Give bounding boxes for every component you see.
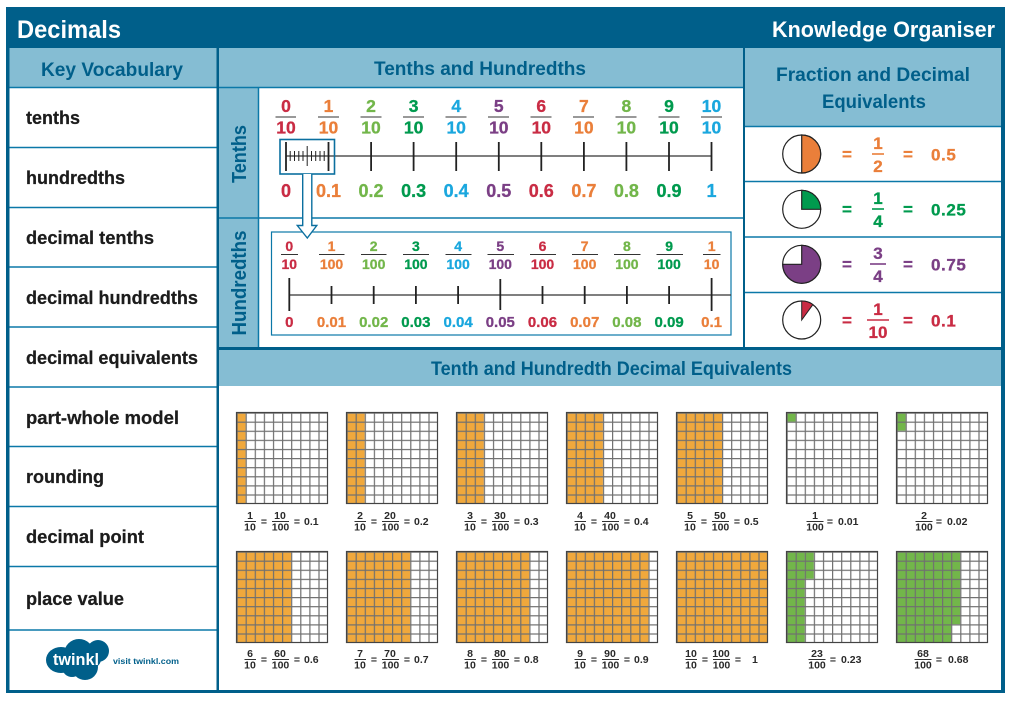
grid: 2/100 [896,412,988,504]
heading: key vocabulary [10,48,216,87]
equation: 1/10 = 10/100 = 0.1: 100 [272,522,289,534]
equation: 3/10 = 30/100 = 0.3 [464,510,539,534]
equation: 2/10 = 20/100 = 0.2: = [404,516,410,528]
equation: 9/10 = 90/100 = 0.9: = [624,654,630,666]
row: three quarters: = [842,255,852,274]
grid: 6/10 [236,552,328,642]
equation: 6/10 = 60/100 = 0.6 [244,648,319,672]
equation: 6/10 = 60/100 = 0.6: = [294,654,300,666]
heading: tenths and hundredths [219,48,743,87]
hundredths fractions: 1 [708,238,716,254]
row: three quarters: 0.75 [931,256,966,274]
hundredths fractions: 4 [454,238,462,254]
equation: 7/10 = 70/100 = 0.7: 0.7 [414,654,429,666]
equation: 7/10 = 70/100 = 0.7: = [371,654,377,666]
equation: 7/10 = 70/100 = 0.7: 10 [354,660,366,672]
side label: tenths: Tenths [229,125,251,183]
hundredths fractions: 100 [489,256,512,272]
grid: 8/10 [456,552,548,642]
equation: 2/10 = 20/100 = 0.2: 10 [354,522,366,534]
row: one tenth: = [903,311,913,330]
hundredths fractions: 100 [573,256,597,272]
tenths fractions: 10 [617,118,636,138]
equation: 10/10 = 100/100 = 1: 10 [685,660,697,672]
equation: 8/10 = 80/100 = 0.8: = [481,654,487,666]
equation: 7/10 = 70/100 = 0.7 [354,648,429,672]
hundredths fractions: 0 [285,238,293,254]
equation: 9/10 = 90/100 = 0.9: 100 [602,660,619,672]
grid: 5/10 [676,412,768,504]
equation: 8/10 = 80/100 = 0.8: 10 [464,660,476,672]
logo: twinkl [46,639,179,680]
equation: 1/10 = 10/100 = 0.1: 0.1 [304,516,319,528]
hundredths decimals: 0.04 [443,314,473,331]
number line: tenths [276,96,722,201]
grid: 4/10 [566,412,658,504]
equation: 68/100 = 0.68: 100 [914,660,932,672]
equation: 3/10 = 30/100 = 0.3: 0.3 [524,516,539,528]
panel: key vocabulary [10,48,216,690]
hundredths fractions: 100 [615,256,639,272]
equation: 6/10 = 60/100 = 0.6: 6 [247,648,253,660]
term: decimal equivalents: decimal equivalents [26,348,198,368]
equation: 23/100 = 0.23: 23 [811,648,823,660]
heading: fraction and decimal equivalents: Equivalents [822,92,926,113]
equation: 10/10 = 100/100 = 1: 10 [685,648,697,660]
row: one quarter: 1 [873,189,883,208]
row: one half: 0.5 [931,146,956,164]
equation: 5/10 = 50/100 = 0.5 [684,510,759,534]
hundredths decimals: 0 [285,314,293,331]
equation: 8/10 = 80/100 = 0.8: 80 [494,648,506,660]
term: decimal hundredths: decimal hundredths [26,288,198,308]
panel: fraction and decimal equivalents [745,48,1001,347]
term: decimal point: decimal point [26,527,144,547]
equation: 2/10 = 20/100 = 0.2: 2 [357,510,363,522]
equation: 8/10 = 80/100 = 0.8: = [514,654,520,666]
grid: 7/10 [346,552,438,642]
tenths fractions: 10 [361,118,381,138]
hundredths fractions: 10 [704,256,720,272]
equation: 10/10 = 100/100 = 1: = [702,654,708,666]
tenths fractions: 8 [622,96,632,116]
equation: 8/10 = 80/100 = 0.8: 8 [467,648,473,660]
term: hundredths: hundredths [26,168,125,188]
equation: 2/100 = 0.02: 0.02 [947,516,968,528]
equation: 5/10 = 50/100 = 0.5: = [734,516,740,528]
heading: fraction and decimal equivalents [745,48,1001,126]
equation: 5/10 = 50/100 = 0.5: 10 [684,522,696,534]
row: one tenth: 1 [873,300,883,319]
equation: 7/10 = 70/100 = 0.7: 100 [382,660,399,672]
equation: 4/10 = 40/100 = 0.4: 10 [574,522,586,534]
tenths decimals: 0.8 [614,181,639,201]
equation: 10/10 = 100/100 = 1 [685,648,758,672]
hundredths decimals: 0.03 [401,314,431,331]
equation: 5/10 = 50/100 = 0.5: 0.5 [744,516,759,528]
term: part-whole model: part-whole model [26,408,179,428]
equation: 6/10 = 60/100 = 0.6: 100 [272,660,289,672]
title: Decimals [17,16,121,44]
tenths decimals: 0.5 [486,181,511,201]
tenths decimals: 0.1 [316,181,341,201]
panel: tenth and hundredth decimal equivalents [219,350,1001,690]
term: decimal tenths: decimal tenths [26,228,154,248]
equation: 10/10 = 100/100 = 1: 100 [712,648,730,660]
hundredths fractions: 2 [370,238,378,254]
hundredths fractions: 9 [665,238,673,254]
equation: 4/10 = 40/100 = 0.4: 40 [604,510,616,522]
equation: 7/10 = 70/100 = 0.7: 70 [384,648,396,660]
hundredths fractions: 7 [581,238,589,254]
hundredths fractions: 100 [320,256,343,272]
tenths fractions: 10 [404,118,424,138]
equation: 4/10 = 40/100 = 0.4: 0.4 [634,516,649,528]
equation: 9/10 = 90/100 = 0.9 [574,648,649,672]
tenths fractions: 10 [446,118,466,138]
number line: hundredths [272,232,731,335]
grid: 2/10 [346,412,438,504]
hundredths decimals [285,314,722,331]
equation: 4/10 = 40/100 = 0.4: 4 [577,510,583,522]
hundredths fractions: 100 [657,256,681,272]
equation: 4/10 = 40/100 = 0.4 [574,510,649,534]
equation: 1/10 = 10/100 = 0.1 [244,510,319,534]
row: one half: = [903,145,913,164]
row: one tenth [783,300,956,342]
equation: 2/10 = 20/100 = 0.2: = [371,516,377,528]
equation: 6/10 = 60/100 = 0.6: 10 [244,660,256,672]
row: one quarter [783,189,966,231]
hundredths decimals: 0.09 [654,314,684,331]
equation: 2/10 = 20/100 = 0.2: 0.2 [414,516,429,528]
equation: 1/10 = 10/100 = 0.1: = [294,516,300,528]
row: one tenth: = [842,311,852,330]
hundredths fractions: 100 [446,256,470,272]
equation: 6/10 = 60/100 = 0.6: 60 [274,648,286,660]
panel: tenths and hundredths [219,48,743,347]
tenths decimals: 0.4 [444,181,469,201]
row: one half [783,134,956,176]
grid: 68/100 [896,552,988,642]
equation: 2/10 = 20/100 = 0.2: 100 [382,522,399,534]
tenths fractions: 6 [536,96,546,116]
heading: tenth and hundredth decimal equivalents: Tenth and Hundredth Decimal Equivalents [431,359,792,380]
tenths fractions: 5 [494,96,504,116]
tenths decimals [281,181,717,201]
equation: 1/10 = 10/100 = 0.1: 10 [244,522,256,534]
tenths decimals: 0 [281,181,291,201]
row: one quarter: 4 [873,212,883,231]
equation: 10/10 = 100/100 = 1: = [735,654,741,666]
equation: 3/10 = 30/100 = 0.3: = [481,516,487,528]
equation: 6/10 = 60/100 = 0.6: = [261,654,267,666]
term: rounding: rounding [26,467,104,487]
tenths decimals: 0.3 [401,181,426,201]
tenths fractions: 10 [489,118,509,138]
equation: 4/10 = 40/100 = 0.4: = [591,516,597,528]
zoom box and arrow [280,140,334,238]
tenths fractions: 10 [532,118,551,138]
equation: 5/10 = 50/100 = 0.5: = [701,516,707,528]
equation: 23/100 = 0.23: 0.23 [841,654,862,666]
hundredths fractions [281,238,720,272]
tenths decimals: 0.2 [358,181,384,201]
row: one quarter: 0.25 [931,200,966,220]
tenths fractions: 10 [702,118,721,138]
equation: 5/10 = 50/100 = 0.5: 5 [687,510,693,522]
equation: 9/10 = 90/100 = 0.9: 9 [577,648,583,660]
row: one quarter: = [903,200,913,219]
equation: 68/100 = 0.68: 68 [917,648,929,660]
equation: 10/10 = 100/100 = 1: 1 [752,654,758,666]
tenths decimals: 1 [706,181,717,201]
tenths fractions: 10 [276,118,296,138]
grid: 9/10 [566,552,658,642]
equation: 2/100 = 0.02: 2 [921,510,927,522]
grid: 1/100 [786,412,878,504]
hundredths fractions: 100 [531,256,554,272]
hundredths fractions: 5 [496,238,504,254]
equation: 6/10 = 60/100 = 0.6: 0.6 [304,654,319,666]
hundredths fractions: 10 [282,256,297,272]
equation: 9/10 = 90/100 = 0.9: = [591,654,597,666]
grid: 23/100 [786,552,878,642]
row: one tenth: 10 [869,323,887,342]
heading: fraction and decimal equivalents: Fraction and Decimal [776,65,970,86]
equation: 3/10 = 30/100 = 0.3: 100 [492,522,509,534]
equation: 1/10 = 10/100 = 0.1: 1 [247,510,253,522]
logo: twinkl: twinkl [53,650,99,669]
hundredths fractions: 1 [328,238,336,254]
equation: 7/10 = 70/100 = 0.7: = [404,654,410,666]
row: three quarters: 4 [873,267,883,286]
equation: 68/100 = 0.68: = [936,654,942,666]
row: one half: = [842,145,852,164]
hundredths decimals: 0.08 [612,314,642,331]
equation: 2/100 = 0.02 [915,510,968,534]
tenths fractions: 1 [324,96,334,116]
row: three quarters: 3 [873,244,883,263]
tenths decimals: 0.7 [571,181,596,201]
row: one half: 1 [873,134,883,153]
equation: 23/100 = 0.23 [808,648,862,672]
equation: 1/100 = 0.01: 0.01 [838,516,859,528]
hundredths fractions: 100 [362,256,386,272]
heading: tenths and hundredths: Tenths and Hundredths [374,59,586,80]
grid: 1/10 [236,412,328,504]
equation: 1/10 = 10/100 = 0.1: 10 [274,510,286,522]
grid: 10/10 [676,552,768,642]
hundredths decimals: 0.02 [359,314,388,331]
tenths fractions: 7 [579,96,589,116]
equation: 9/10 = 90/100 = 0.9: 10 [574,660,586,672]
equation: 9/10 = 90/100 = 0.9: 0.9 [634,654,649,666]
term: place value: place value [26,589,124,609]
hundredths fractions: 3 [412,238,420,254]
equation: 3/10 = 30/100 = 0.3: 10 [464,522,476,534]
tenths fractions: 0 [281,96,291,116]
equation: 3/10 = 30/100 = 0.3: 30 [494,510,506,522]
tenths fractions [276,96,722,138]
tenths fractions: 2 [366,96,376,116]
tenths fractions: 4 [451,96,461,116]
heading: key vocabulary: Key Vocabulary [41,60,183,81]
row: one quarter: = [842,200,852,219]
equation: 2/100 = 0.02: = [936,516,942,528]
tenths fractions: 3 [409,96,419,116]
side label: hundredths: Hundredths [229,230,251,336]
equation: 8/10 = 80/100 = 0.8: 0.8 [524,654,539,666]
equation: 2/100 = 0.02: 100 [915,522,933,534]
equation: 23/100 = 0.23: = [830,654,836,666]
equation: 3/10 = 30/100 = 0.3: = [514,516,520,528]
hundredths decimals: 0.07 [570,314,599,331]
equation: 2/10 = 20/100 = 0.2 [354,510,429,534]
logo: twinkl: visit twinkl.com [113,656,179,666]
hundredths decimals: 0.01 [317,314,346,331]
tenths decimals: 0.9 [656,181,682,201]
equation: 9/10 = 90/100 = 0.9: 90 [604,648,616,660]
tenths fractions: 10 [702,96,721,116]
equation: 8/10 = 80/100 = 0.8 [464,648,539,672]
hundredths decimals: 0.06 [528,314,557,331]
equation: 4/10 = 40/100 = 0.4: = [624,516,630,528]
equation: 1/100 = 0.01: = [827,516,833,528]
equation: 1/10 = 10/100 = 0.1: = [261,516,267,528]
tenths fractions: 9 [664,96,674,116]
equation: 10/10 = 100/100 = 1: 100 [713,660,730,672]
equation: 1/100 = 0.01: 1 [812,510,818,522]
grid: 3/10 [456,412,548,504]
equation: 68/100 = 0.68: 0.68 [948,654,969,666]
tenths fractions: 10 [574,118,594,138]
equation: 8/10 = 80/100 = 0.8: 100 [492,660,509,672]
tenths decimals: 0.6 [529,181,554,201]
equation: 4/10 = 40/100 = 0.4: 100 [602,522,619,534]
row: three quarters [783,244,966,286]
heading: tenth and hundredth decimal equivalents [219,350,1001,386]
tenths fractions: 10 [659,118,679,138]
tenths fractions: 10 [319,118,338,138]
subtitle: Knowledge Organiser [772,17,995,42]
equation: 3/10 = 30/100 = 0.3: 3 [467,510,473,522]
equation: 7/10 = 70/100 = 0.7: 7 [357,648,363,660]
hundredths decimals: 0.05 [486,314,515,331]
hundredths fractions: 8 [623,238,631,254]
equation: 1/100 = 0.01 [806,510,859,534]
equation: 68/100 = 0.68 [914,648,969,672]
row: three quarters: = [903,255,913,274]
row: one tenth: 0.1 [931,312,956,330]
equation: 2/10 = 20/100 = 0.2: 20 [384,510,396,522]
hundredths fractions: 6 [539,238,547,254]
hundredths decimals: 0.1 [701,314,722,331]
equation: 5/10 = 50/100 = 0.5: 100 [712,522,729,534]
hundredths fractions: 100 [404,256,428,272]
equation: 23/100 = 0.23: 100 [808,660,826,672]
term: tenths: tenths [26,108,80,128]
equation: 5/10 = 50/100 = 0.5: 50 [714,510,726,522]
row: one half: 2 [873,157,883,176]
equation: 1/100 = 0.01: 100 [806,522,824,534]
